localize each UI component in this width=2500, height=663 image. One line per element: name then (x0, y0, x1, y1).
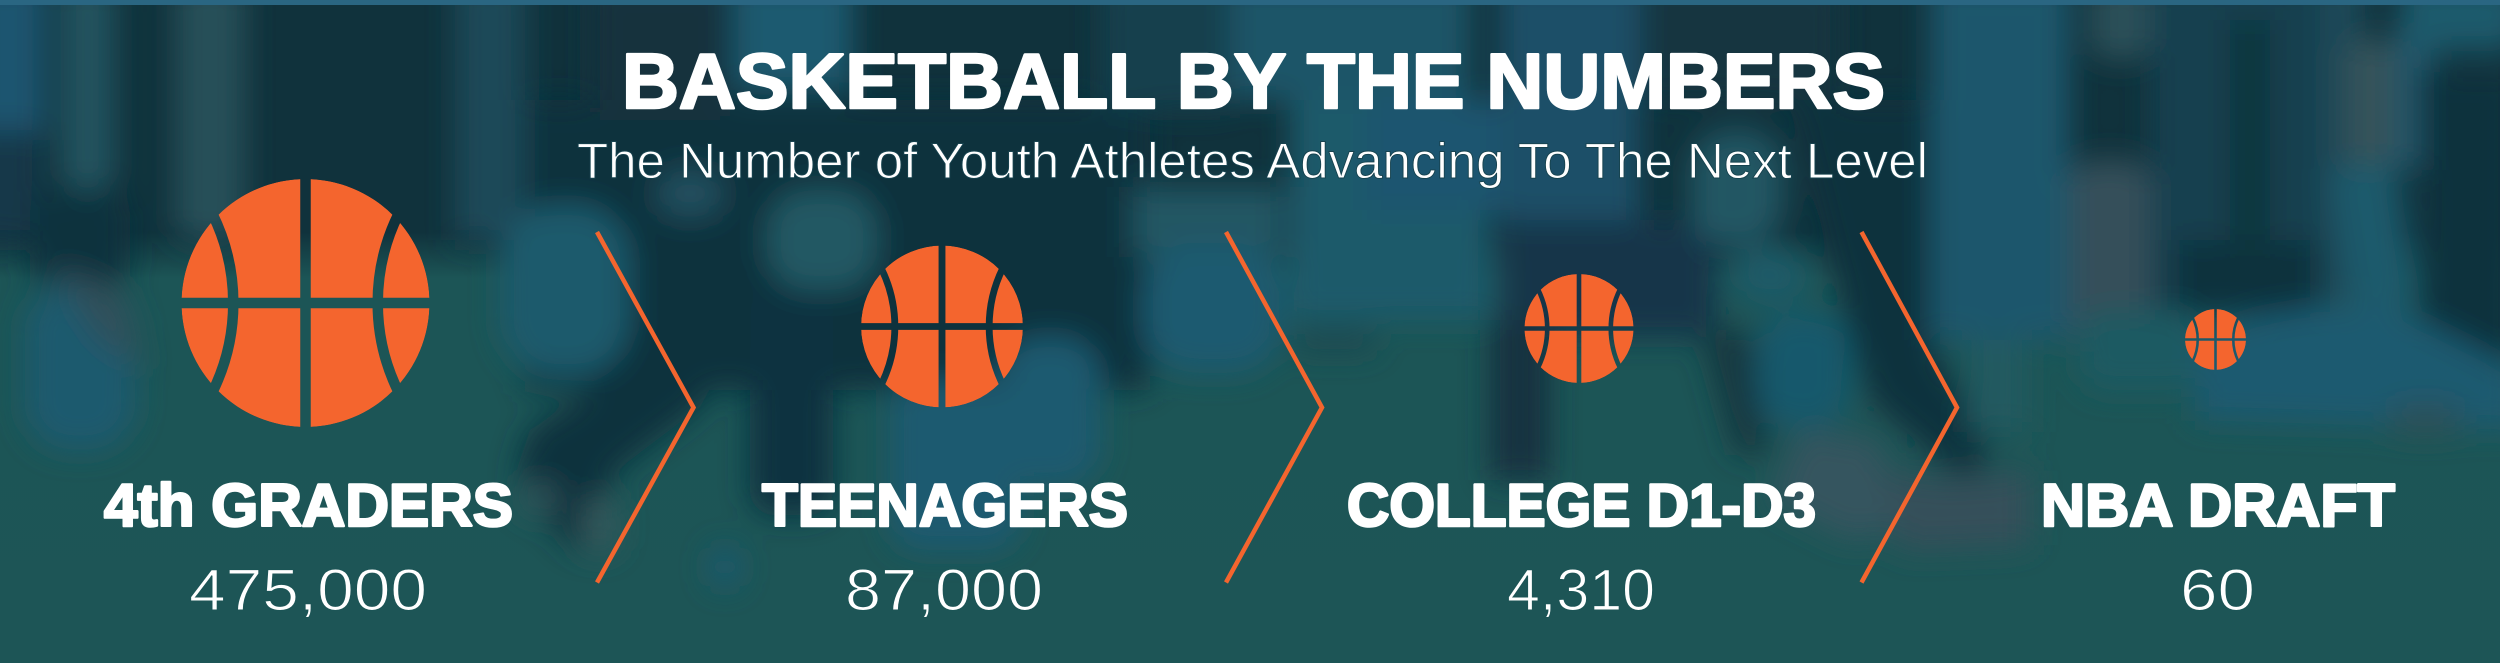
centre-right figure (1500, 0, 1640, 220)
title: BASKETBALL BY THE NUMBERS (622, 37, 1885, 125)
label: NBA draft: NBA DRAFT (2041, 472, 2395, 539)
left columns (0, 0, 45, 140)
arrow: chevron 1 (597, 232, 694, 582)
number: 87,000: 87,000 (845, 558, 1043, 623)
icon: basketball NBA draft (2185, 309, 2246, 370)
label: 4th graders: 4th GRADERS (104, 472, 513, 539)
number: 4,310: 4,310 (1507, 558, 1655, 623)
centre (890, 380, 1020, 550)
label: teenagers: TEENAGERS (762, 472, 1128, 539)
arrow: chevron 3 (1862, 232, 1957, 582)
icon: basketball teenagers (861, 246, 1023, 407)
centre-left figure (525, 100, 1150, 390)
number: 60: 60 (2180, 558, 2255, 623)
right side (1930, 0, 2070, 340)
arrow: chevron 2 (1226, 232, 1322, 582)
subtitle: The Number of Youth Athletes Advancing To The Next Level (577, 133, 1928, 189)
icon: basketball college (1524, 274, 1634, 383)
number: 475,000: 475,000 (189, 558, 427, 623)
label: college: COLLEGE D1-D3 (1347, 472, 1816, 539)
icon: basketball 4th graders (182, 179, 430, 427)
